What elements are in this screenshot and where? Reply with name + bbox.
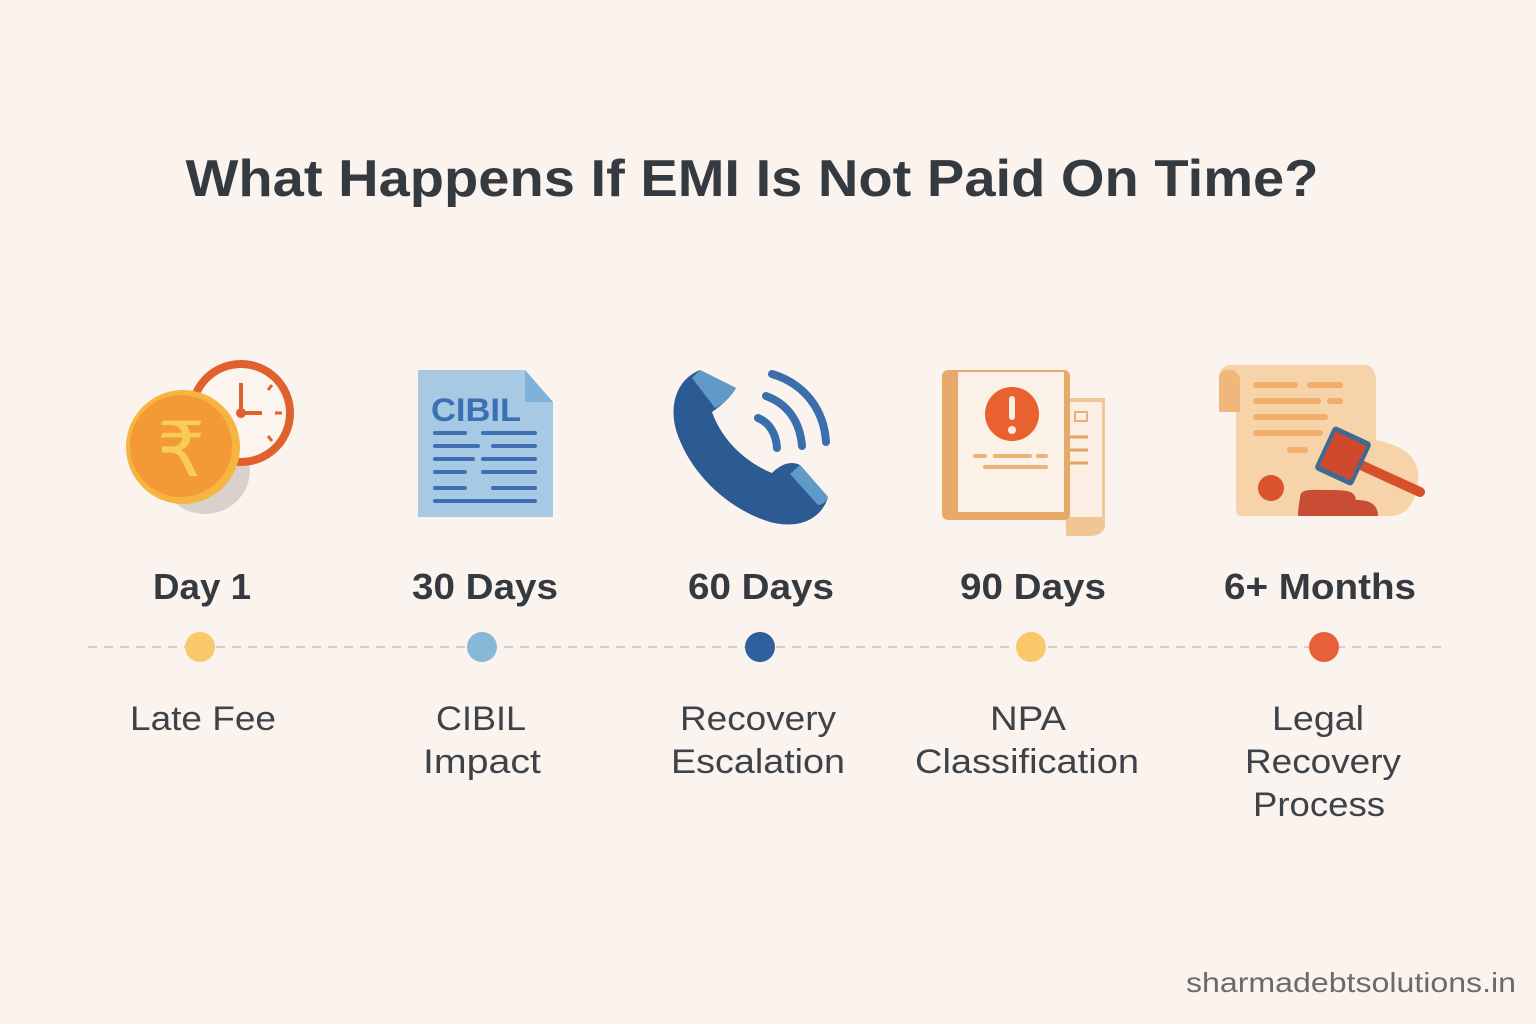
labels: consequences: Impact — [423, 743, 542, 781]
labels: consequences: Late Fee — [130, 700, 276, 738]
icon: CIBIL report: CIBIL — [431, 392, 521, 428]
icon: NPA documents — [942, 370, 1105, 536]
title: What Happens If EMI Is Not Paid On Time? — [186, 150, 1318, 208]
labels: consequences: Classification — [915, 743, 1139, 781]
footer website: sharmadebtsolutions.in — [1186, 967, 1516, 998]
labels: consequences: CIBIL — [436, 700, 526, 738]
labels: consequences: Process — [1253, 786, 1385, 824]
labels: stage periods: Day 1 — [153, 566, 251, 607]
timeline line — [88, 646, 1446, 648]
icon: legal scroll with gavel — [1219, 365, 1420, 516]
icon: rupee coin and clock: ₹ — [157, 408, 205, 493]
labels: stage periods: 60 Days — [688, 566, 834, 607]
labels: consequences: NPA — [990, 700, 1066, 738]
labels: consequences — [130, 700, 1401, 824]
labels: stage periods: 90 Days — [960, 566, 1106, 607]
icon: phone — [673, 370, 828, 524]
labels: stage periods — [153, 566, 1416, 607]
timeline dots — [185, 632, 1339, 662]
labels: stage periods: 6+ Months — [1224, 566, 1416, 607]
labels: stage periods: 30 Days — [412, 566, 558, 607]
icon: rupee coin and clock — [126, 360, 294, 514]
labels: consequences: Legal — [1272, 700, 1364, 738]
icon: CIBIL report — [418, 370, 553, 517]
labels: consequences: Escalation — [671, 743, 845, 781]
labels: consequences: Recovery — [680, 700, 836, 738]
labels: consequences: Recovery — [1245, 743, 1401, 781]
